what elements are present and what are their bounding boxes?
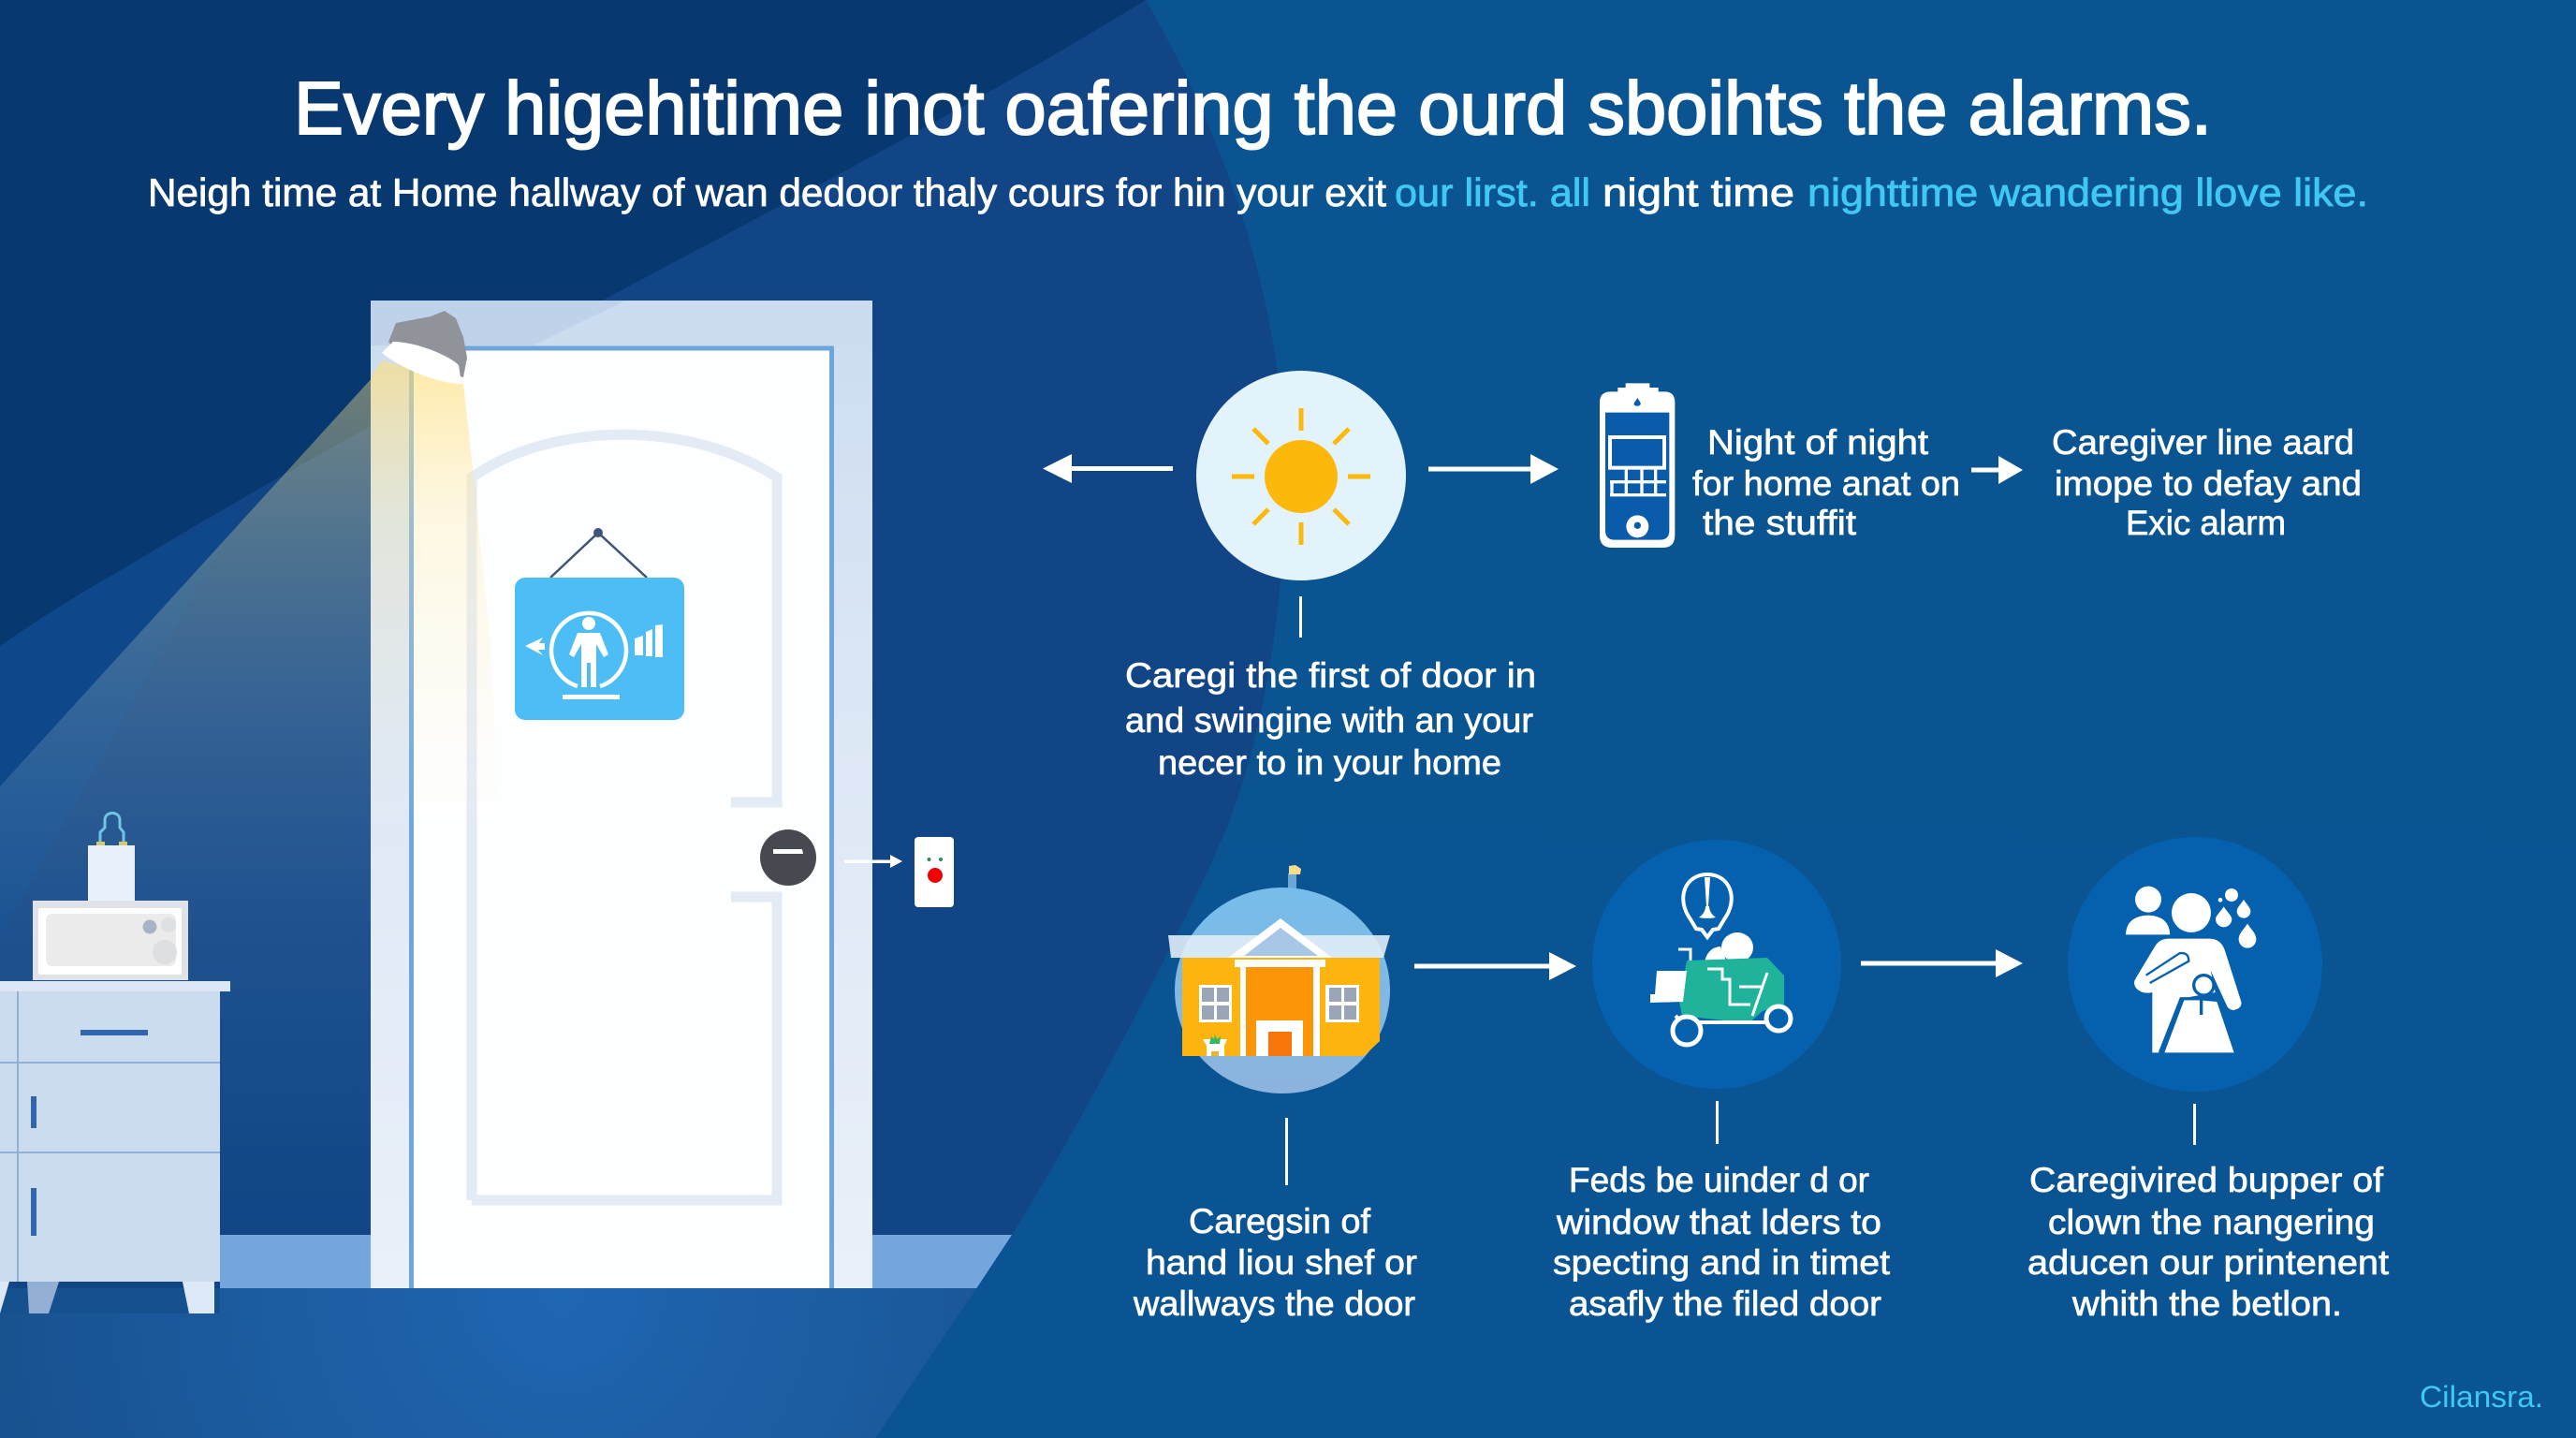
caregiver alarm caption [2052,423,2362,542]
house windows [1199,985,1359,1022]
phone caption: Night of night [1707,423,1929,462]
phone caption [1692,423,1960,542]
family caption [2027,1161,2390,1323]
water drops [2216,888,2256,948]
connector under sun [1299,596,1302,638]
sign on door [515,528,684,720]
subtitle: Neigh time at Home hallway of wan dedoor thaly cours for hin your exit [148,170,1386,214]
cart caption: specting and in timet [1553,1243,1891,1282]
sign hanger [550,533,647,578]
title: Every higehitime inot oafering the ourd sboihts the alarms. [294,66,2212,150]
connector under family [2193,1104,2196,1145]
door knob [760,829,816,886]
cart caption [1553,1161,1891,1323]
subtitle: nighttime wandering llove like. [1808,170,2368,214]
cart back block [1650,971,1687,1003]
sensor box [915,837,954,907]
rider [1721,932,1753,962]
small person [2126,887,2170,934]
subtitle [148,170,2368,214]
phone caption: the stuffit [1703,504,1857,542]
chimney [1288,873,1296,888]
arrow cart to family [1861,949,2023,977]
door beam light [371,360,501,843]
box with hook [88,813,135,901]
caregiver alarm caption: Exic alarm [2126,504,2286,542]
door arch panel [472,434,777,1200]
sensor arrow [844,855,902,868]
arrow left of sun [1043,454,1173,483]
sun caption: Caregi the first of door in [1125,656,1536,695]
bedside cabinet [0,981,230,1313]
brand mark: Cilansra. [2420,1380,2543,1414]
house icon [1168,865,1390,1093]
phone device icon [1600,383,1675,548]
family caption: whith the betlon. [2071,1284,2342,1323]
light beam on wall [0,376,373,1236]
cart caption: Feds be uinder d or [1569,1161,1869,1199]
door leaf [412,348,831,1288]
cabinet handles [31,1030,148,1236]
sun caption: necer to in your home [1158,743,1501,782]
house globe [1175,888,1390,1093]
arrow right of sun [1428,454,1559,484]
house caption [1133,1202,1417,1323]
roof band [1168,935,1390,958]
mobility cart alert icon [1592,840,1841,1089]
door frame [371,301,872,1288]
family caption: Caregivired bupper of [2029,1161,2384,1199]
planter [1203,1034,1227,1056]
house caption: wallways the door [1133,1284,1415,1323]
small arrow top row [1971,456,2023,484]
house door [1256,1020,1303,1056]
cart body [1679,958,1784,1023]
cabinet legs [0,1282,9,1313]
adult body [2134,939,2242,1052]
child [2159,976,2234,1052]
caregiver alarm caption: imope to defay and [2055,464,2362,503]
sign plate [515,578,684,720]
sun caption [1125,656,1536,782]
ceiling lamp [382,311,467,384]
sun icon [1196,371,1406,580]
door sensor with arrow [844,837,954,907]
cart caption: asafly the filed door [1569,1284,1881,1323]
microwave [33,901,188,980]
arrow house to cart [1414,952,1576,980]
house caption: hand liou shef or [1146,1243,1417,1282]
right background region [875,0,2576,1438]
subtitle: night time [1603,170,1794,214]
caregiver alarm caption: Caregiver line aard [2052,423,2354,462]
family caption: clown the nangering [2048,1203,2375,1241]
family caregiver icon [2068,837,2322,1092]
large head [2172,893,2211,932]
door blue edge lines [412,348,831,1288]
cabinet body [0,991,220,1282]
cart wheels [1673,1017,1701,1045]
house walls [1182,958,1380,1056]
door with frame [371,301,872,1288]
connector under house [1285,1118,1288,1185]
baseboard and floor [0,1235,1030,1438]
cart caption: window that lders to [1556,1203,1881,1241]
house caption: Caregsin of [1189,1202,1371,1240]
cart seat lines [1707,969,1767,1016]
family caption: aducen our printenent [2027,1243,2390,1282]
sign person icon [525,613,663,699]
cabinet top [0,981,230,991]
alert pin [1683,874,1732,937]
adult arm outline [2146,953,2188,983]
sun caption: and swingine with an your [1125,701,1533,740]
connector under cart [1716,1101,1719,1144]
phone caption: for home anat on [1692,464,1960,503]
subtitle: our lirst. all [1395,170,1590,214]
gable roof [1228,918,1332,958]
